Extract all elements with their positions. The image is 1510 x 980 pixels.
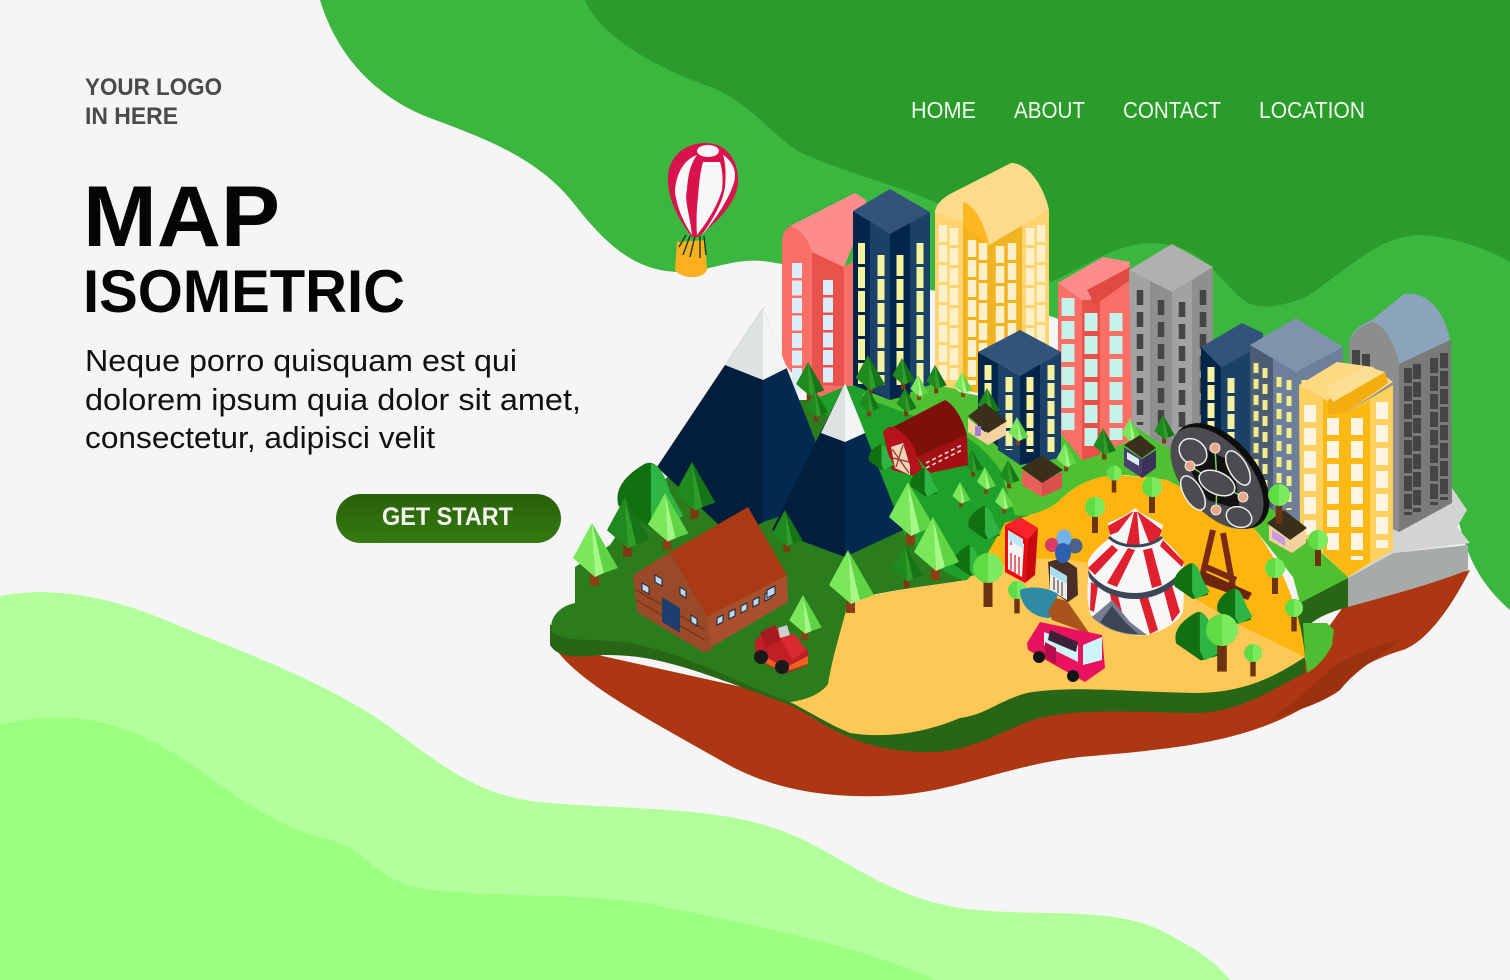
round trees behind tent bbox=[973, 466, 1162, 613]
wave: top dark green bbox=[585, 0, 1510, 306]
tower: yellow front bbox=[1299, 362, 1393, 577]
island: grey platform side bbox=[1348, 545, 1468, 607]
bushes bbox=[617, 444, 1001, 576]
mountain: small bbox=[772, 383, 903, 557]
small house: roofed tan bbox=[968, 403, 1007, 445]
island: rock shadow bbox=[1270, 640, 1400, 720]
land: right light meadow bbox=[1100, 420, 1348, 603]
logo text: YOUR LOGO bbox=[85, 74, 222, 101]
tower: navy back right bbox=[1201, 323, 1263, 460]
fair bushes bbox=[1174, 563, 1253, 660]
navigation: ABOUT bbox=[1014, 97, 1085, 123]
land: dark meadow bbox=[551, 400, 1000, 702]
title bbox=[83, 169, 405, 325]
logo text bbox=[85, 74, 222, 130]
circus tent bbox=[1087, 508, 1184, 635]
island: rock base bbox=[553, 570, 1470, 796]
body text bbox=[85, 343, 581, 455]
tower: grey bbox=[1129, 244, 1213, 450]
tower: navy tall bbox=[853, 189, 930, 400]
log cabin bbox=[633, 507, 788, 652]
island: grey platform top bbox=[1340, 485, 1470, 578]
island: grass edge bbox=[550, 600, 1305, 752]
red booth bbox=[1005, 517, 1038, 583]
wave: bright green bottom bbox=[0, 717, 935, 980]
mountain: big bbox=[657, 308, 830, 540]
body text: dolorem ipsum quia dolor sit amet, bbox=[85, 382, 581, 417]
button: GET START bbox=[382, 503, 513, 531]
ice cream truck bbox=[1020, 587, 1105, 682]
land: orange fairground bbox=[975, 475, 1305, 657]
land: sand bbox=[790, 540, 1305, 735]
navigation bbox=[911, 97, 1365, 123]
navigation: LOCATION bbox=[1259, 97, 1365, 123]
land: mid meadow bbox=[806, 380, 1030, 582]
title: MAP bbox=[83, 169, 280, 265]
navigation: HOME bbox=[911, 97, 976, 123]
title: ISOMETRIC bbox=[83, 258, 405, 325]
logo text: IN HERE bbox=[85, 103, 178, 130]
balloon booth bbox=[1045, 530, 1082, 602]
tower: yellow arched bbox=[935, 163, 1049, 395]
small house: purple kiosk bbox=[1124, 435, 1156, 478]
balloon bbox=[668, 143, 738, 277]
tower: salmon stepped bbox=[1058, 257, 1132, 460]
wave: pale green bottom bbox=[0, 592, 1230, 980]
island bbox=[550, 377, 1470, 796]
barn bbox=[883, 400, 968, 476]
tower: grey arched bbox=[1349, 293, 1452, 532]
truck bbox=[754, 625, 808, 674]
wave: top green bbox=[320, 0, 1510, 610]
button bbox=[336, 494, 561, 543]
body text: Neque porro quisquam est qui bbox=[85, 343, 517, 378]
body text: consectetur, adipisci velit bbox=[85, 420, 435, 455]
tower: slate bbox=[1250, 318, 1343, 525]
ferris wheel bbox=[1152, 405, 1288, 600]
round trees front bbox=[1206, 484, 1328, 676]
foreground conifers bbox=[573, 462, 959, 640]
island: right grass edge bbox=[1300, 578, 1348, 628]
navigation: CONTACT bbox=[1123, 97, 1221, 123]
forest conifers bbox=[796, 355, 1175, 513]
land: light meadow bbox=[862, 377, 1180, 516]
tower: salmon arched bbox=[782, 193, 866, 400]
small house: tan right bbox=[1267, 510, 1307, 553]
island: right grass block bbox=[1303, 623, 1334, 673]
small house: red bbox=[1021, 455, 1063, 497]
tower: navy short bbox=[978, 330, 1061, 465]
